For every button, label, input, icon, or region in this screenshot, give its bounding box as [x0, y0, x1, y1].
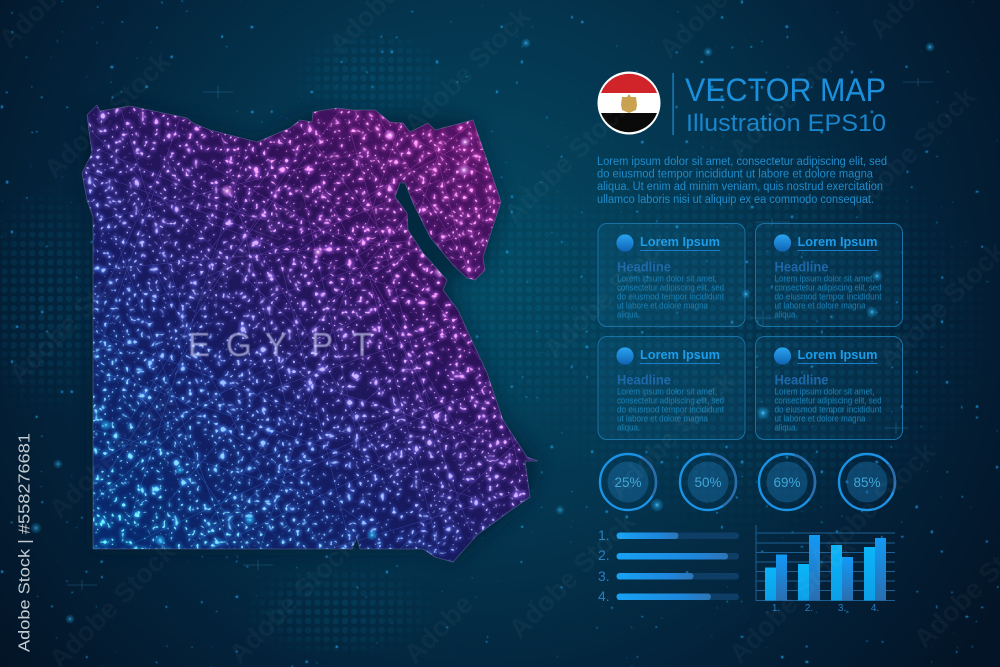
panel: card bottom right: consectetur adipiscing elit, sed: [774, 396, 882, 406]
donut: 69%: 69%: [774, 474, 800, 490]
map label: EGYPT: EGYPT: [188, 326, 372, 363]
map: Egypt: [75, 95, 550, 575]
panel: card bottom left: aliqua.: [617, 422, 640, 434]
map outline: [82, 105, 538, 562]
stock watermarks: Adobe Stock: [183, 176, 322, 314]
panel: card top left: do eiusmod tempor incididunt: [617, 292, 724, 302]
panel: card bottom right: ut labore et dolore magna: [774, 414, 866, 424]
horizontal bars: 1.: [598, 527, 610, 543]
stock watermarks: Adobe Stock: [603, 366, 742, 504]
divider line: [672, 73, 674, 135]
panel: card top right: consectetur adipiscing elit, sed: [774, 282, 882, 294]
panel: card bottom left: consectetur adipiscing elit, sed: [617, 396, 724, 406]
panel: card bottom left: ut labore et dolore magna: [617, 414, 709, 424]
panel: card bottom right: Lorem ipsum dolor sit amet,: [774, 386, 874, 398]
panel: card bottom right: do eiusmod tempor incididunt: [774, 404, 882, 416]
subtitle: Illustration EPS10: Illustration EPS10: [686, 110, 886, 137]
horizontal bars: 3.: [598, 568, 610, 584]
panel: card top right: Lorem ipsum dolor sit amet,: [774, 274, 874, 284]
donut: 25%: [590, 444, 666, 520]
stock watermarks: Adobe Stock: [538, 226, 677, 364]
intro text: do eiusmod tempor incididunt ut labore et dolore magna: [597, 168, 874, 180]
donut: 85%: 85%: [854, 474, 880, 490]
glowing stars and flares: [30, 38, 935, 624]
panel: card top left: Lorem ipsum dolor sit amet,: [617, 274, 717, 284]
column chart: 1.: [772, 603, 780, 614]
panel: card top left: aliqua.: [617, 310, 640, 320]
panel: card top left: Lorem Ipsum: [640, 234, 720, 249]
stock watermarks: Adobe Stock: [503, 506, 642, 644]
stock watermarks: Adobe: [398, 589, 479, 667]
panel: card top left: [598, 224, 745, 326]
panel: card bottom left: do eiusmod tempor incididunt: [617, 404, 724, 416]
intro text: aliqua. Ut enim ad minim veniam, quis nostrud exercitation: [597, 181, 883, 193]
donut: 25%: 25%: [614, 474, 642, 490]
column chart: 3.: [838, 603, 846, 614]
donut: 69%: [753, 448, 821, 516]
donut: 50%: 50%: [694, 474, 722, 490]
panel: card bottom right: Lorem Ipsum: [798, 347, 878, 362]
stock watermarks: Adobe Stock: [723, 26, 862, 164]
horizontal bars: 4.: [598, 588, 610, 604]
panel: card top right: [756, 224, 902, 326]
stock watermarks: Adobe Stock: [843, 81, 982, 219]
stock id caption: Adobe Stock | #558276681: [16, 433, 34, 652]
panel: card bottom left: Lorem ipsum dolor sit amet,: [617, 386, 717, 398]
panel: card bottom right: Headline: [774, 372, 829, 388]
horizontal bars: 2.: [598, 547, 610, 563]
column chart: 4.: [871, 603, 879, 614]
panel: card bottom left: Lorem Ipsum: [640, 347, 720, 362]
horizontal bars: [598, 527, 739, 604]
panel: card bottom right: [756, 336, 902, 440]
donut: 85%: [828, 443, 906, 521]
panel: card top left: consectetur adipiscing elit, sed: [617, 282, 724, 294]
stock watermarks: Adobe Stock: [223, 531, 362, 667]
stock watermarks: Adobe Stock: [803, 436, 942, 574]
intro text: ullamco laboris nisi ut aliquip ex ea commodo consequat.: [597, 194, 874, 206]
stock watermarks: Adobe Stock: [498, 91, 637, 229]
panel: card top right: aliqua.: [774, 310, 798, 320]
panel: card top right: ut labore et dolore magna: [774, 300, 866, 312]
stock watermarks: Adobe Stock: [398, 1, 537, 139]
panel: card bottom left: [598, 336, 745, 440]
stock watermarks: Adobe Stock: [3, 251, 142, 389]
donut: 50%: [678, 452, 738, 512]
panel: card top right: Lorem Ipsum: [798, 234, 878, 249]
panel: card bottom left: Headline: [617, 372, 671, 388]
map shadow: [82, 106, 538, 562]
title: VECTOR MAP: VECTOR MAP: [685, 72, 886, 108]
stock watermarks: Adobe Stock: [43, 386, 182, 524]
column chart: [756, 525, 895, 614]
panel: card top left: Headline: [617, 258, 671, 274]
panel: card top left: ut labore et dolore magna: [617, 300, 709, 312]
intro text: Lorem ipsum dolor sit amet, consectetur adipiscing elit, sed: [597, 156, 887, 168]
panel: card top right: do eiusmod tempor incididunt: [774, 292, 882, 302]
panel: card bottom right: aliqua.: [774, 422, 798, 434]
stock watermarks: Adobe Stock: [38, 46, 177, 184]
column chart: 2.: [805, 603, 813, 614]
panel: card top right: Headline: [774, 258, 829, 274]
icon: Egypt flag: [598, 72, 660, 134]
stock watermarks: Adobe Stock: [723, 531, 862, 667]
intro text: [597, 156, 887, 206]
